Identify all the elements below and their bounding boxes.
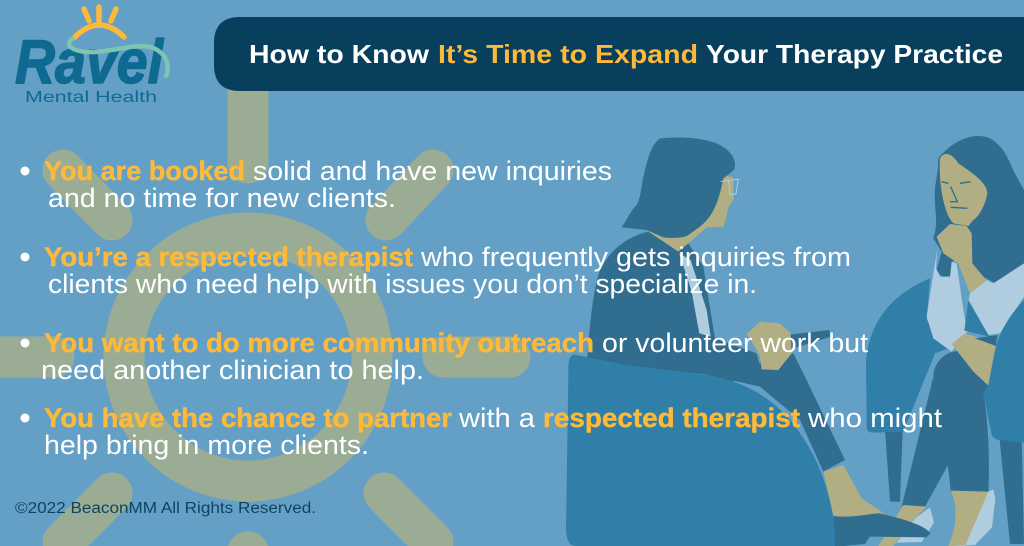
- bullet 2: who frequently gets inquiries from: [420, 242, 851, 272]
- illustration: therapist and client seated: [566, 136, 1024, 546]
- therapist shoe: [833, 513, 931, 546]
- client hair: [933, 136, 1024, 283]
- logo wordmark: Ravel: [15, 28, 165, 97]
- title text: Your Therapy Practice: [706, 39, 1003, 69]
- client legs: [902, 351, 989, 507]
- background sun graphic: [0, 76, 510, 546]
- client chair legs: [885, 430, 1024, 544]
- therapist hair: [622, 137, 735, 238]
- front chair on right edge: [983, 300, 1024, 443]
- title text: How to Know: [249, 39, 430, 69]
- title text: [249, 39, 1003, 69]
- bullet 4: with a: [458, 403, 536, 433]
- copyright: ©2022 BeaconMM All Rights Reserved.: [15, 500, 316, 517]
- bullet 4: respected therapist: [543, 403, 800, 433]
- client shirt: [968, 263, 1024, 335]
- therapist shirt: [679, 253, 711, 337]
- therapist pen: [757, 330, 831, 350]
- client face: [940, 154, 987, 226]
- therapist jacket: [587, 232, 760, 382]
- bullet 3: [20, 328, 869, 385]
- client facial features: [942, 182, 971, 208]
- bullet list: [20, 156, 943, 460]
- bullet 2: You’re a respected therapist: [44, 242, 413, 272]
- title bar: [214, 17, 1024, 91]
- bullet 4: [20, 403, 943, 460]
- therapist neck: [648, 210, 723, 252]
- bullet 4: help bring in more clients.: [44, 430, 369, 460]
- logo sun: [75, 7, 124, 37]
- client chair back: [866, 278, 953, 433]
- client neckline gap: [964, 300, 989, 337]
- logo tagline: Mental Health: [25, 89, 157, 106]
- title text: It’s Time to Expand: [438, 39, 698, 69]
- logo: Ravel Mental Health: [15, 7, 168, 106]
- therapist trousers: [717, 353, 845, 472]
- client chest band: [975, 335, 997, 346]
- bullet 3: You want to do more community outreach: [44, 328, 594, 358]
- bullet 4: You have the chance to partner: [44, 403, 452, 433]
- therapist leg: [823, 465, 888, 520]
- logo wave: [69, 39, 168, 76]
- bullet 1: solid and have new inquiries: [253, 156, 612, 186]
- client feet: [878, 491, 988, 546]
- bullet 4: who might: [807, 403, 943, 433]
- bullet 3: or volunteer work but: [602, 328, 869, 358]
- therapist face: [700, 175, 734, 227]
- therapist chair: [566, 354, 835, 546]
- client hand and arm: [937, 224, 987, 293]
- therapist hand: [747, 322, 792, 370]
- bullet 1: [20, 156, 612, 213]
- bullet 1: and no time for new clients.: [48, 183, 396, 213]
- therapist glasses: [721, 179, 738, 195]
- client shoes: [897, 489, 995, 546]
- bullet 3: need another clinician to help.: [41, 355, 424, 385]
- client sleeve: [927, 248, 967, 352]
- bullet 2: clients who need help with issues you don’t specialize in.: [48, 269, 757, 299]
- bullet 1: You are booked: [44, 156, 245, 186]
- bullet 2: [20, 242, 851, 299]
- client forearm: [952, 333, 997, 386]
